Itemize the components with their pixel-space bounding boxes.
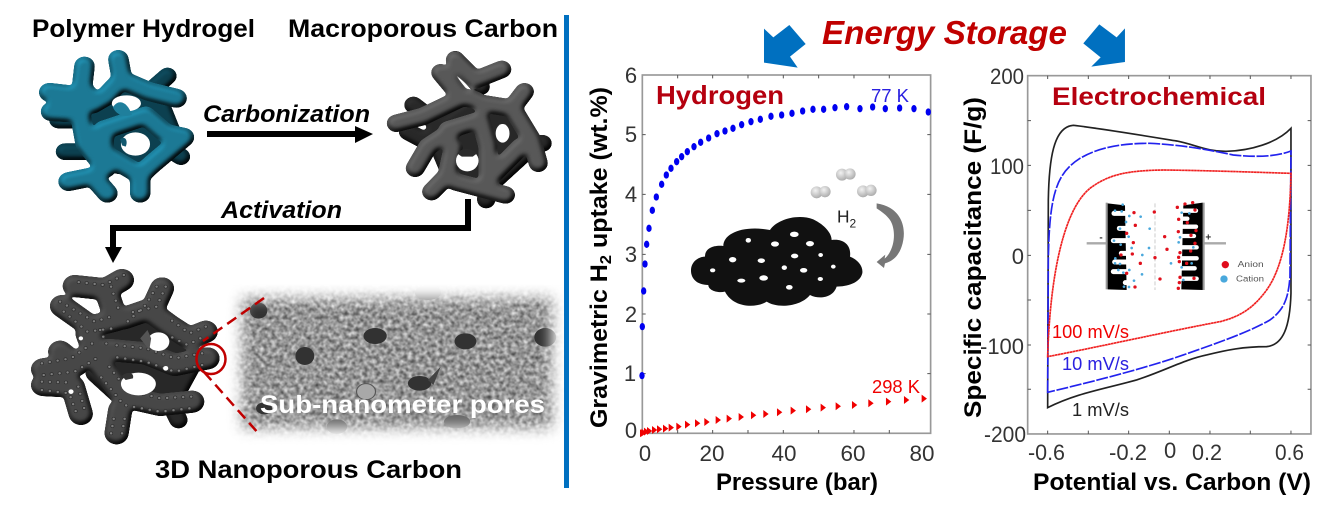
y tick labels: -200: [984, 422, 1026, 447]
x tick labels: 40: [772, 441, 796, 466]
x tick labels: 80: [910, 441, 934, 466]
y tick labels: 1: [624, 361, 636, 386]
inset: supercapacitor schematic: [1087, 201, 1264, 290]
legend: anion: Anion: [1238, 260, 1264, 269]
panel heading: Hydrogen: Hydrogen: [656, 80, 784, 110]
arrow: carbonization: [207, 126, 373, 143]
panel heading: Electrochemical: Electrochemical: [1052, 83, 1266, 111]
x tick labels: [639, 441, 934, 466]
y tick labels: 5: [625, 122, 637, 147]
legend: cation: Cation: [1236, 274, 1264, 283]
y tick labels: 4: [625, 182, 637, 207]
plot frame: [1028, 76, 1311, 434]
plot frame: [642, 75, 931, 433]
heading: Macroporous Carbon: Macroporous Carbon: [288, 15, 558, 43]
curve: 10 mV/s: [1048, 143, 1291, 392]
label: 1 mV/s: 1 mV/s: [1072, 400, 1129, 420]
curve: 1 mV/s: [1048, 125, 1291, 408]
label: 298 K: 298 K: [872, 377, 920, 397]
y axis title: 2: [598, 255, 615, 264]
legend: cation: [1220, 274, 1264, 283]
arrow: to electrochemical: [1083, 24, 1125, 67]
x tick labels: 0: [1164, 438, 1176, 463]
icon: H2 molecules: [811, 168, 877, 198]
label: Carbonization: Carbonization: [203, 101, 370, 128]
x tick labels: -0.2: [1109, 440, 1147, 465]
series: 298 K: [640, 395, 927, 437]
x tick labels: 0.2: [1192, 440, 1222, 465]
label: Activation: Activation: [220, 197, 342, 224]
y tick labels: 2: [625, 302, 637, 327]
y tick labels: [980, 64, 1026, 447]
icon: polymer hydrogel structure: [49, 59, 184, 193]
electrode: negative: [1108, 203, 1132, 290]
title: Energy Storage: Energy Storage: [822, 14, 1067, 51]
label: minus and plus: -: [1099, 232, 1103, 243]
x axis title: Potential vs. Carbon (V): [1033, 469, 1311, 496]
label: H2: H: [837, 207, 849, 227]
y axis title: Specific capacitance (F/g): [960, 97, 987, 418]
y tick labels: -100: [980, 334, 1024, 359]
y tick labels: [624, 63, 637, 443]
heading: Polymer Hydrogel: Polymer Hydrogel: [32, 15, 255, 43]
electrode: positive: [1178, 203, 1203, 290]
label: 10 mV/s: 10 mV/s: [1062, 354, 1129, 374]
callout: zoom circle with dashed lines: [196, 298, 264, 434]
curve: 100 mV/s: [1048, 170, 1291, 357]
y axis title: uptake (wt.%): [586, 87, 613, 255]
micrograph: sub-nanometer pores: [225, 285, 565, 445]
arrow: curved: [877, 203, 904, 268]
ions: [1119, 201, 1198, 290]
y tick labels: 0: [625, 418, 637, 443]
y tick labels: 6: [625, 63, 637, 88]
series: 77 K: [639, 103, 931, 379]
label: 3D Nanoporous Carbon: 3D Nanoporous Carbon: [155, 456, 462, 484]
x tick labels: 60: [840, 441, 866, 466]
y tick labels: 100: [990, 154, 1024, 179]
curves: [1048, 125, 1291, 408]
inset: supercapacitor schematic: +: [1205, 233, 1211, 244]
icon: porous carbon particle with H2: [691, 168, 904, 306]
pores: [250, 285, 556, 434]
chart: electrochemical capacitance: [960, 64, 1311, 496]
arrow: activation: [105, 199, 468, 263]
y axis title: Gravimetric H: [586, 271, 613, 428]
legend: anion: [1222, 260, 1264, 269]
label: Sub-nanometer pores: Sub-nanometer pores: [260, 391, 545, 419]
x tick labels: 0: [639, 441, 651, 466]
y tick labels: 3: [625, 242, 637, 267]
chart: hydrogen uptake: [586, 63, 934, 496]
divider line: [564, 15, 569, 488]
x tick labels: -0.6: [1028, 440, 1065, 465]
label: H2: 2: [849, 216, 856, 230]
icon: macroporous carbon structure: [396, 59, 543, 200]
y tick labels: 200: [990, 64, 1024, 89]
arrow: to hydrogen: [764, 25, 806, 68]
x tick labels: 0.6: [1275, 440, 1304, 465]
label: 100 mV/s: 100 mV/s: [1052, 322, 1129, 342]
x axis title: Pressure (bar): [716, 469, 878, 496]
label: 77 K: 77 K: [871, 86, 909, 106]
icon: 3D nanoporous carbon structure: [42, 275, 208, 433]
y tick labels: 0: [1012, 244, 1024, 269]
x tick labels: 20: [700, 441, 724, 466]
x tick labels: [1028, 438, 1304, 465]
